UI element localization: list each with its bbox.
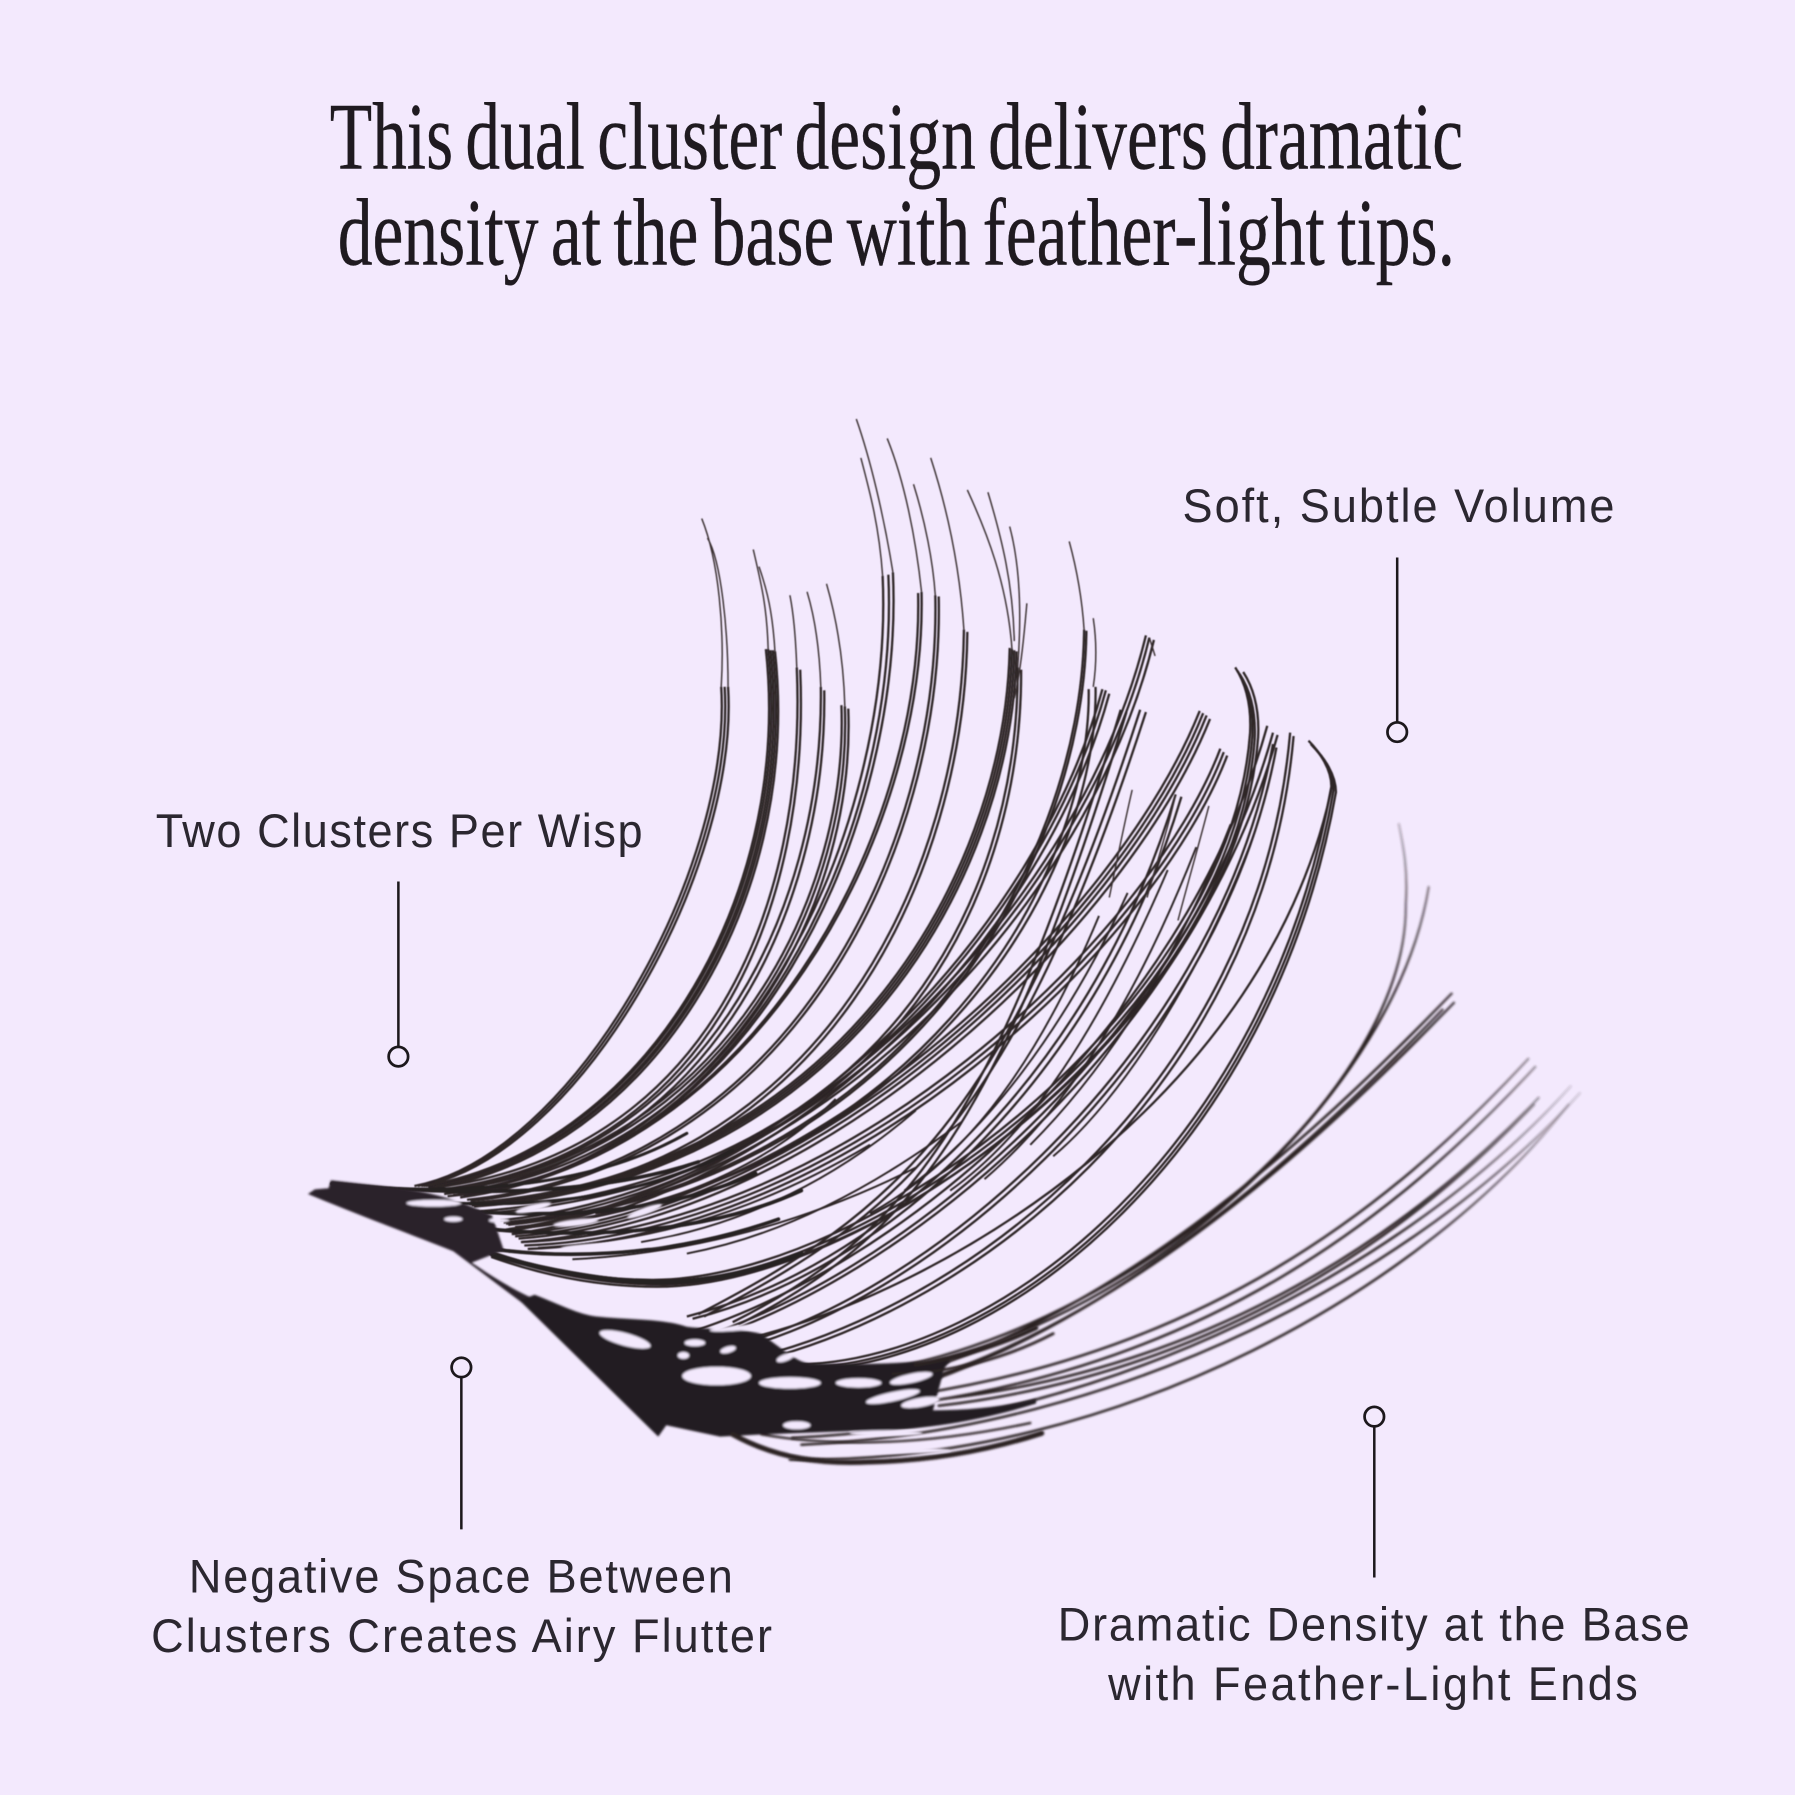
callout: Two Clusters Per Wisp: Two Clusters Per Wisp <box>156 804 643 857</box>
callout: Soft, Subtle Volume: Soft, Subtle Volume <box>1183 479 1614 532</box>
callout: Negative Space <box>151 1358 772 1662</box>
callout: Negative Space: Negative Space Between <box>189 1550 733 1603</box>
upper lash cluster strands <box>332 419 1336 1370</box>
callout: Dramatic Density: Dramatic Density at the Base <box>1058 1598 1690 1651</box>
callout: Soft, Subtle Volume <box>1183 479 1614 742</box>
base gaps <box>406 1200 950 1454</box>
upper base <box>308 1180 538 1306</box>
crossing strands from lower base <box>698 710 1140 1314</box>
callout: Dramatic Density: with Feather-Light Ends <box>1107 1657 1638 1710</box>
callout: Negative Space: Clusters Creates Airy Flutter <box>151 1609 772 1662</box>
lower base <box>520 1295 1036 1437</box>
upper tips <box>702 419 1209 920</box>
top right strands of the lower base <box>733 1328 1053 1462</box>
heavy strands over the upper base <box>332 1133 801 1282</box>
callout: Dramatic Density <box>1058 1407 1690 1710</box>
crossing lattice strands <box>538 824 1254 1259</box>
lash illustration <box>308 419 1580 1462</box>
lower lash cluster strands <box>790 824 1580 1460</box>
title <box>330 83 1463 285</box>
callout: Two Clusters Per Wisp <box>156 804 643 1066</box>
lash base bands <box>308 1180 1053 1462</box>
